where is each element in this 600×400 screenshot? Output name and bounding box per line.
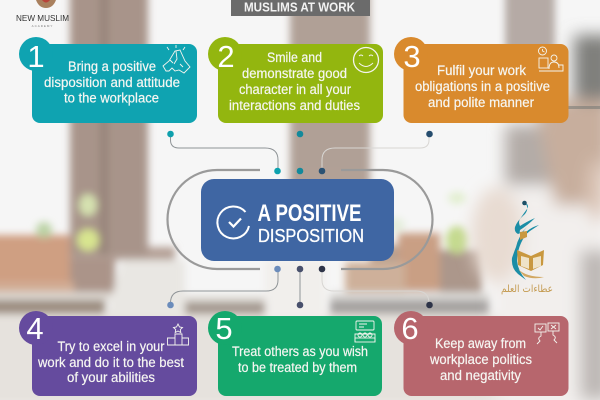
central heading: A POSITIVE xyxy=(258,200,362,227)
text 4: work and do it to the best xyxy=(37,355,184,370)
panel 4 xyxy=(19,311,197,396)
text 6: Keep away from xyxy=(435,336,526,351)
panel 2 xyxy=(208,37,383,123)
icon: smiley xyxy=(354,48,378,72)
text 2: demonstrate good xyxy=(242,66,347,81)
text 1: to the workplace xyxy=(64,90,159,106)
text 1 xyxy=(44,59,180,106)
text 4: Try to excel in your xyxy=(58,339,165,354)
icon: people meeting xyxy=(355,321,375,342)
text 2: interactions and duties xyxy=(229,98,360,113)
number 2: 2 xyxy=(217,39,235,74)
text 1: Bring a positive xyxy=(68,59,156,74)
connector dots xyxy=(167,131,433,308)
text 2: character in all your xyxy=(239,82,351,97)
text 1: disposition and attitude xyxy=(44,75,180,90)
text 2: Smile and xyxy=(267,50,322,65)
panel 3 xyxy=(394,37,568,123)
central panel: A Positive Disposition xyxy=(201,179,394,261)
text 3: Fulfil your work xyxy=(437,63,526,78)
text 6: and negativity xyxy=(440,368,521,383)
text 3 xyxy=(415,63,550,110)
number 1: 1 xyxy=(27,39,45,74)
logo: calligraphy and book xyxy=(501,201,553,295)
logo arabic caption: عطاءات العلم xyxy=(501,284,553,295)
panel 1 xyxy=(19,37,197,123)
text 5: Treat others as you wish xyxy=(232,344,368,359)
text 5: to be treated by them xyxy=(238,360,357,375)
number 4: 4 xyxy=(26,311,44,346)
logo: New Muslim Academy xyxy=(16,0,69,28)
text 4 xyxy=(37,339,184,385)
icon: podium with star xyxy=(168,324,188,345)
number 3: 3 xyxy=(403,39,421,74)
panel 5 xyxy=(208,311,382,396)
connector lines xyxy=(170,134,429,305)
logo: New Muslim Academy: ACADEMY xyxy=(32,24,53,28)
text 3: obligations in a positive xyxy=(415,79,550,94)
central subheading: DISPOSITION xyxy=(258,226,364,246)
panel 6 xyxy=(394,311,568,396)
text 6 xyxy=(429,336,532,383)
text 5 xyxy=(232,344,368,375)
text 3: and polite manner xyxy=(428,95,534,110)
logo: New Muslim Academy: NEW MUSLIM xyxy=(16,13,69,23)
text 6: workplace politics xyxy=(429,352,532,367)
text 4: of your abilities xyxy=(67,370,155,385)
number 6: 6 xyxy=(401,311,419,346)
pill outline around central panel xyxy=(167,170,432,269)
icon: office worker xyxy=(538,47,563,71)
icon: voting signs xyxy=(535,323,559,344)
icon: check circle xyxy=(217,206,249,238)
number 5: 5 xyxy=(215,311,233,346)
icon: high five xyxy=(163,45,190,73)
text 2 xyxy=(229,50,360,113)
